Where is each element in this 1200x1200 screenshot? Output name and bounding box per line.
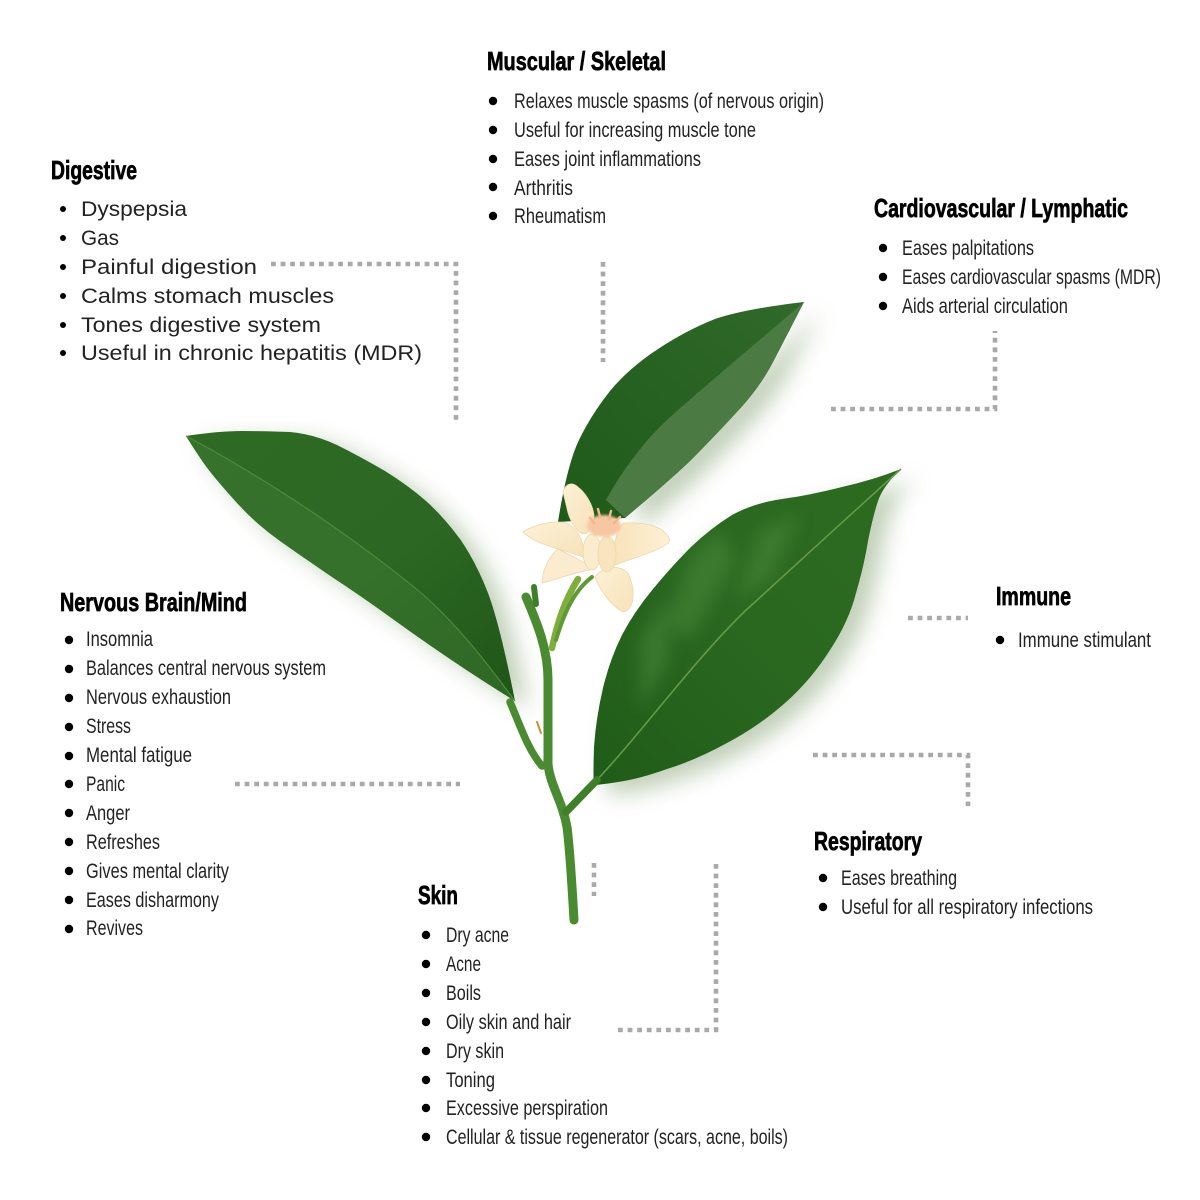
list: Boils <box>446 982 481 1005</box>
panel: skin <box>418 880 788 1149</box>
list <box>60 198 422 365</box>
list <box>879 237 1161 318</box>
leaf: right <box>594 469 901 785</box>
list: Gas <box>81 227 119 250</box>
list: Dry acne <box>446 924 509 947</box>
list: Mental fatigue <box>86 744 192 767</box>
connector: respiratory <box>813 755 968 806</box>
list: Toning <box>446 1069 495 1092</box>
connector: immune <box>908 616 968 620</box>
list: Dyspepsia <box>81 198 187 221</box>
heading: Immune <box>996 581 1071 611</box>
list: Painful digestion <box>81 256 257 279</box>
list: Useful for increasing muscle tone <box>514 119 756 142</box>
heading: Nervous Brain/Mind <box>60 587 247 617</box>
list: Immune stimulant <box>1018 629 1151 652</box>
heading: Muscular / Skeletal <box>487 46 666 76</box>
connector: skin short <box>592 863 596 896</box>
list: Revives <box>86 917 143 940</box>
flower <box>523 484 670 612</box>
heading: Respiratory <box>814 826 922 856</box>
list: Panic <box>86 773 125 796</box>
list <box>422 924 788 1149</box>
list: Tones digestive system <box>81 314 321 337</box>
connector: nervous <box>235 782 460 786</box>
list: Calms stomach muscles <box>81 285 334 308</box>
panel: respiratory <box>814 826 1093 919</box>
list: Relaxes muscle spasms (of nervous origin) <box>514 90 824 113</box>
panel: digestive <box>51 155 422 365</box>
leaf shadows <box>200 312 915 795</box>
connector: muscular <box>601 262 605 362</box>
list: Eases joint inflammations <box>514 148 701 171</box>
list: Dry skin <box>446 1040 504 1063</box>
list <box>489 90 824 228</box>
list: Gives mental clarity <box>86 860 229 883</box>
list: Cellular & tissue regenerator (scars, acne, boils) <box>446 1126 788 1149</box>
connector: skin <box>618 864 716 1030</box>
panel: plant sprig illustration <box>186 302 915 920</box>
list: Balances central nervous system <box>86 657 326 680</box>
list: Anger <box>86 802 130 825</box>
list: Arthritis <box>514 177 573 200</box>
list: Eases disharmony <box>86 889 219 912</box>
heading: Digestive <box>51 155 137 185</box>
panel: muscular / skeletal <box>487 46 824 228</box>
panel: immune <box>996 581 1151 652</box>
connector: digestive <box>271 264 456 420</box>
leaf: left <box>186 431 515 701</box>
panel: cardiovascular / lymphatic <box>874 193 1161 318</box>
leaf: top <box>558 302 804 522</box>
connector: cardiovascular <box>831 331 995 409</box>
list <box>819 867 1093 919</box>
list: Excessive perspiration <box>446 1097 608 1120</box>
list: Oily skin and hair <box>446 1011 571 1034</box>
list: Eases breathing <box>841 867 957 890</box>
list: Aids arterial circulation <box>902 295 1068 318</box>
panel: nervous brain/mind <box>60 587 326 940</box>
list: Eases palpitations <box>902 237 1034 260</box>
heading: Skin <box>418 880 458 910</box>
list: Rheumatism <box>514 205 606 228</box>
list: Useful in chronic hepatitis (MDR) <box>81 342 422 365</box>
list: Useful for all respiratory infections <box>841 896 1093 919</box>
list: Insomnia <box>86 628 153 651</box>
list: Stress <box>86 715 131 738</box>
list: Nervous exhaustion <box>86 686 231 709</box>
list: Acne <box>446 953 481 976</box>
list: Refreshes <box>86 831 160 854</box>
list <box>65 628 326 940</box>
stem <box>510 577 597 920</box>
